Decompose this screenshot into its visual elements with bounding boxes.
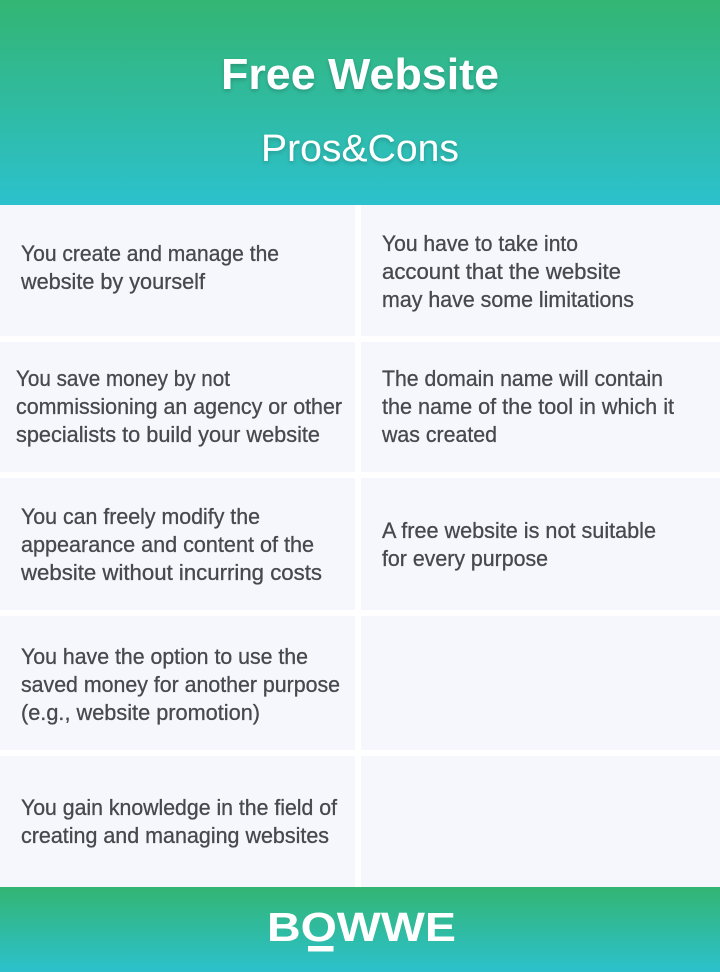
panel: row 2 con: was created: [381, 422, 497, 447]
title: Free Website: [221, 50, 499, 99]
panel: row 1 con: [361, 205, 720, 336]
panel: row 2 con: [361, 342, 720, 472]
panel: row 5 pro: [0, 756, 355, 887]
panel: row 5 pro: creating and managing websites: [21, 823, 329, 848]
panel: row 4 con (empty): [361, 616, 720, 750]
panel: row 1 con: account that the website: [382, 259, 621, 284]
panel: row 4 pro: saved money for another purpose: [21, 672, 340, 697]
panel: row 4 pro: You have the option to use the: [21, 644, 308, 669]
header banner: [0, 0, 720, 205]
panel: row 4 pro: [0, 616, 355, 750]
panel: row 1 pro: [0, 205, 355, 336]
panel: row 2 pro: commissioning an agency or other: [16, 394, 342, 419]
panel: row 3 con: [361, 478, 720, 610]
footer banner: [0, 887, 720, 972]
panel: row 2 con: the name of the tool in which it: [382, 394, 674, 419]
panel: row 2 pro: You save money by not: [16, 366, 230, 391]
panel: row 3 pro: website without incurring costs: [20, 560, 322, 585]
panel: row 2 pro: specialists to build your website: [16, 422, 320, 447]
panel: row 3 con: A free website is not suitable: [382, 518, 656, 543]
panel: row 1 con: You have to take into: [382, 231, 578, 256]
subtitle: Pros&Cons: [261, 128, 459, 170]
panel: row 3 con: for every purpose: [382, 546, 548, 571]
panel: row 1 con: may have some limitations: [382, 287, 634, 312]
panel: row 5 con (empty): [361, 756, 720, 887]
panel: row 2 con: The domain name will contain: [382, 366, 663, 391]
panel: row 3 pro: You can freely modify the: [21, 504, 260, 529]
panel: row 3 pro: [0, 478, 355, 610]
panel: row 3 pro: appearance and content of the: [21, 532, 314, 557]
panel: row 1 pro: website by yourself: [20, 269, 206, 294]
logo: BOWWE: BOWWE: [267, 904, 456, 950]
panel: row 2 pro: [0, 342, 355, 472]
panel: row 4 pro: (e.g., website promotion): [21, 700, 260, 725]
panel: row 5 pro: You gain knowledge in the field of: [21, 795, 338, 820]
panel: row 1 pro: You create and manage the: [21, 241, 279, 266]
